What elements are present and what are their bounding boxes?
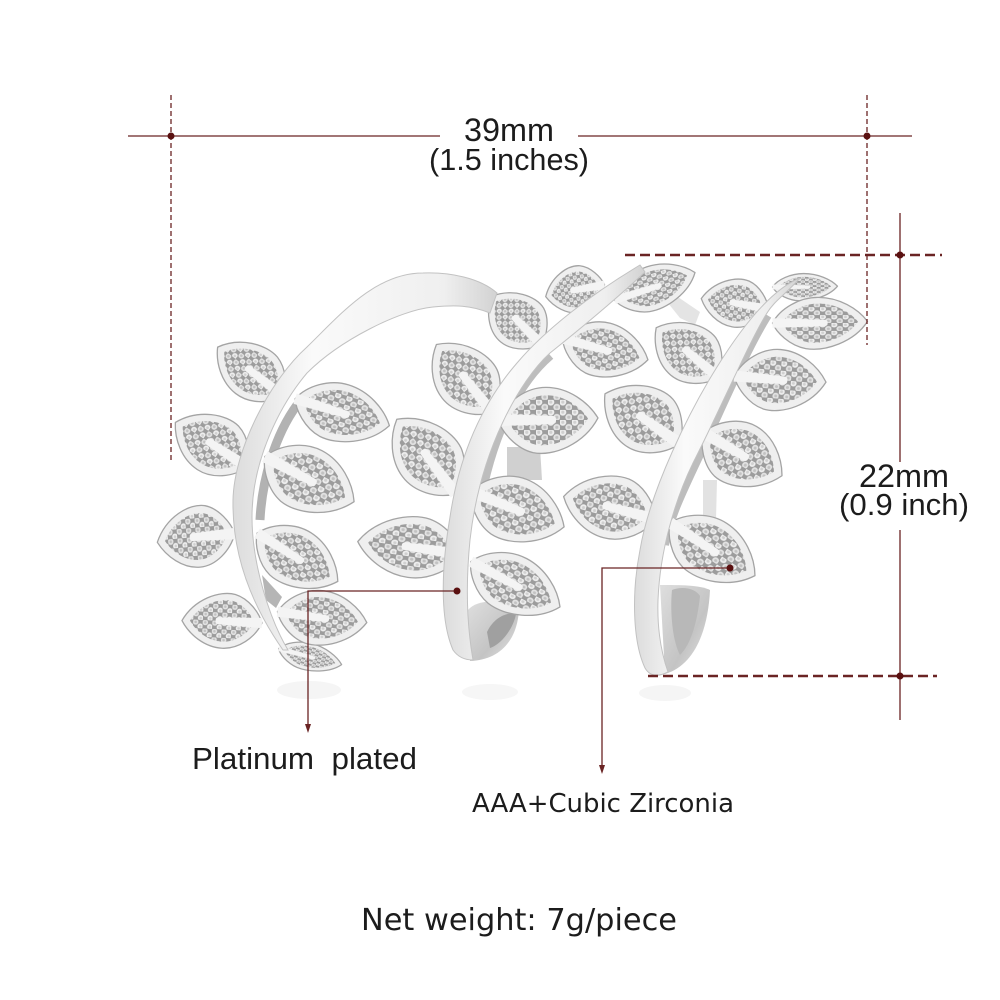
leaves of left earring [154,324,397,679]
width dimension: 39mm: (1.5 inches) [429,142,589,177]
width dimension: 39mm: 39mm [464,112,554,148]
height dimension: 22mm [625,213,969,720]
callout: platinum plated [192,588,460,776]
leaves of right earring [556,273,868,603]
callout: cubic zirconia: AAA+Cubic Zirconia [472,789,734,819]
product: leaf ear cuff earrings [154,253,867,701]
width dimension: 39mm [128,95,912,462]
callout: cubic zirconia [472,564,734,819]
reflections under earrings [277,681,691,701]
stems (front bands) [233,265,800,675]
leaves of middle earring [354,253,702,635]
net weight note: Net weight: 7g/piece [361,903,677,938]
height dimension: 22mm: 22mm [859,458,949,494]
rear bands [260,293,767,674]
callout: platinum plated: Platinum plated [192,741,417,776]
height dimension: 22mm: (0.9 inch) [839,487,969,522]
